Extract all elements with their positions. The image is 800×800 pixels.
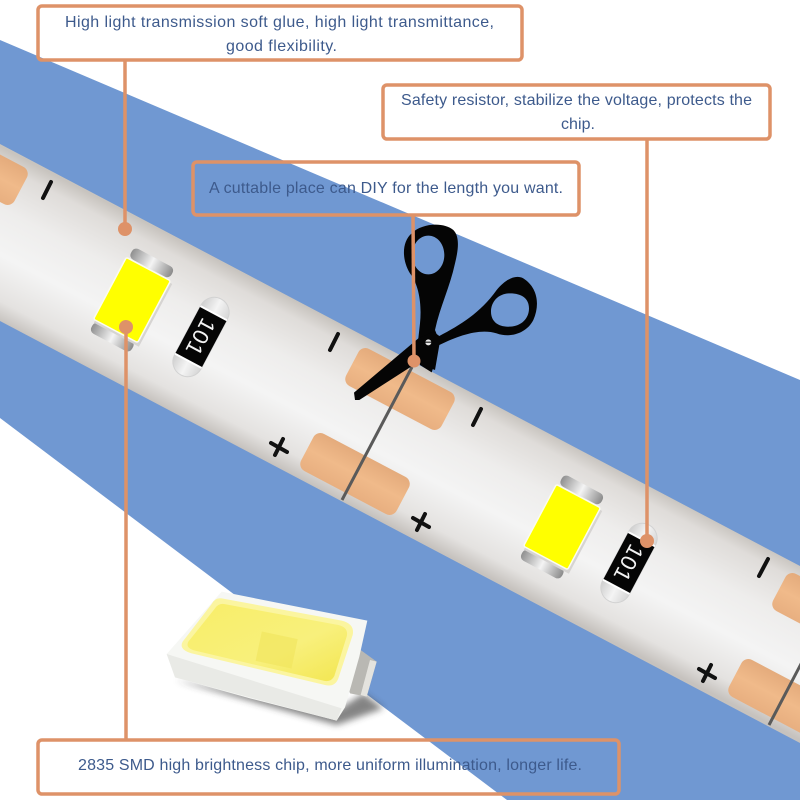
callout: safety resistor: Safety resistor, stabilize the voltage, protects the bbox=[401, 92, 752, 109]
callout: 2835 SMD chip: 2835 SMD high brightness chip, more uniform illumination, longer life. bbox=[78, 757, 582, 774]
callout: soft glue: High light transmission soft glue, high light transmittance, bbox=[65, 14, 494, 31]
cut line right bbox=[769, 662, 800, 725]
icon: scissors bbox=[354, 225, 537, 400]
SMD chip close-up bbox=[167, 592, 383, 725]
cut line left bbox=[342, 367, 412, 500]
resistor left: 101 bbox=[181, 314, 221, 359]
strip body bbox=[0, 144, 800, 743]
callout: safety resistor: chip. bbox=[561, 116, 595, 133]
LED chip left bbox=[87, 246, 179, 356]
callout: safety resistor bbox=[383, 85, 770, 548]
LED chip right bbox=[517, 473, 609, 583]
callout: soft glue: good flexibility. bbox=[226, 38, 337, 55]
resistor right bbox=[596, 518, 662, 608]
callout: cuttable place bbox=[193, 162, 579, 368]
chip lead bbox=[347, 648, 377, 697]
callout: soft glue bbox=[38, 6, 522, 236]
chip shadow bbox=[175, 680, 383, 725]
resistor left bbox=[168, 292, 234, 382]
callout: 2835 SMD chip bbox=[38, 320, 619, 794]
chip lens bbox=[182, 598, 353, 685]
chip body bbox=[167, 592, 367, 721]
LED strip bbox=[0, 120, 800, 744]
resistor right: 101 bbox=[609, 540, 649, 585]
callout: cuttable place: A cuttable place can DIY for the length you want. bbox=[209, 180, 563, 197]
solder pads bbox=[0, 120, 800, 744]
minus and plus polarity marks bbox=[43, 182, 768, 681]
